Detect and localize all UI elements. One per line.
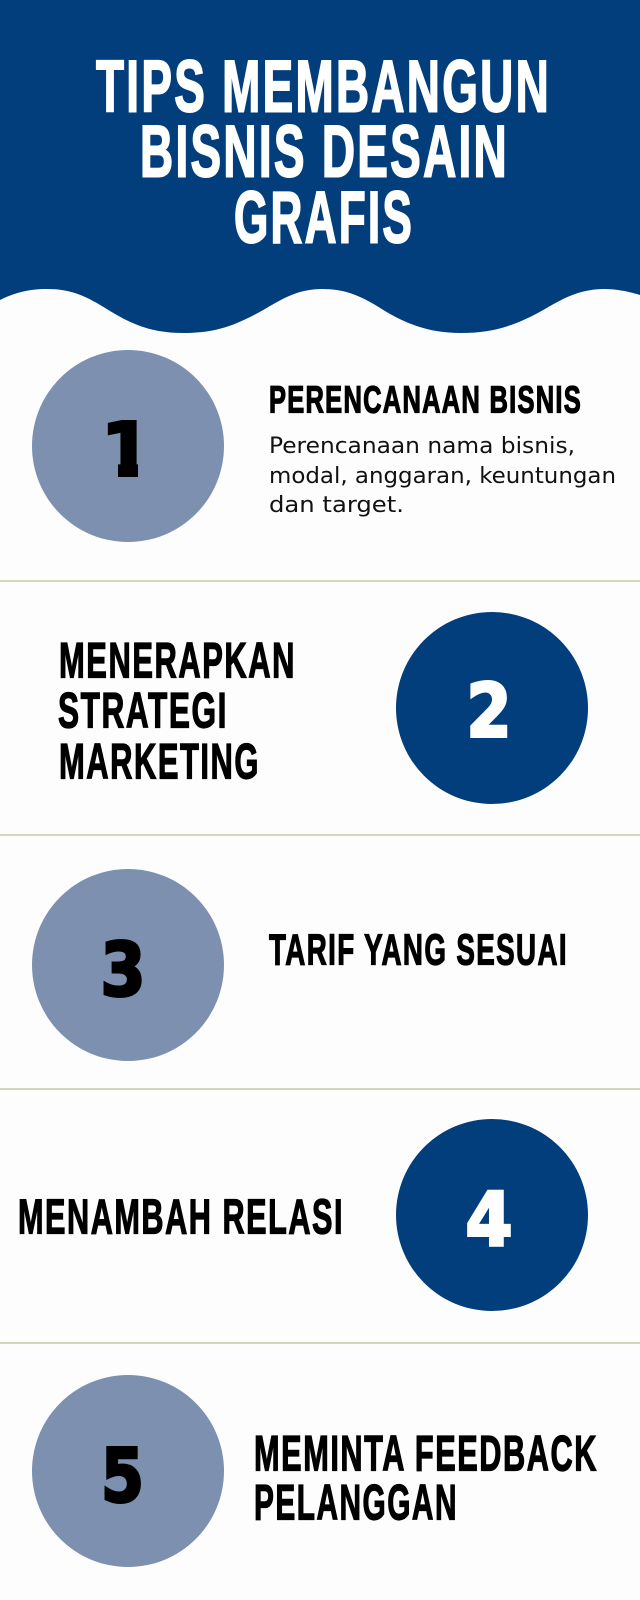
heading: meminta feedback pelanggan: [254, 1426, 598, 1530]
circle: step 5: [32, 1375, 224, 1567]
title: [96, 46, 551, 258]
number 4: 4: [466, 1178, 512, 1264]
panel: step 5: [32, 1375, 598, 1567]
number 3: 3: [100, 928, 146, 1014]
heading: menambah relasi: MENAMBAH RELASI: [18, 1190, 344, 1244]
panel: step 3: [32, 869, 568, 1061]
panel: step 2: [58, 612, 588, 804]
heading: menerapkan strategi marketing: MARKETING: [59, 734, 260, 790]
circle: step 1: [32, 350, 224, 542]
circle: step 2: [396, 612, 588, 804]
header banner with wavy edge: [0, 0, 640, 333]
text block: description: dan target.: [269, 493, 404, 518]
panel: step 1: [32, 350, 616, 542]
circle: step 3: [32, 869, 224, 1061]
text block: description: Perencanaan nama bisnis,: [269, 434, 575, 459]
text block: description: modal, anggaran, keuntungan: [269, 464, 616, 489]
panel: step 4: [18, 1119, 588, 1311]
circle: step 4: [396, 1119, 588, 1311]
title: GRAFIS: [234, 178, 414, 258]
heading: menerapkan strategi marketing: [58, 632, 296, 790]
number 1: 1: [101, 408, 152, 494]
heading: meminta feedback pelanggan: PELANGGAN: [254, 1474, 458, 1530]
text block: description: [269, 434, 616, 518]
heading: menerapkan strategi marketing: MENERAPKAN: [59, 632, 296, 688]
heading: menerapkan strategi marketing: STRATEGI: [58, 682, 228, 738]
number 5: 5: [101, 1434, 144, 1520]
number 2: 2: [466, 668, 512, 754]
